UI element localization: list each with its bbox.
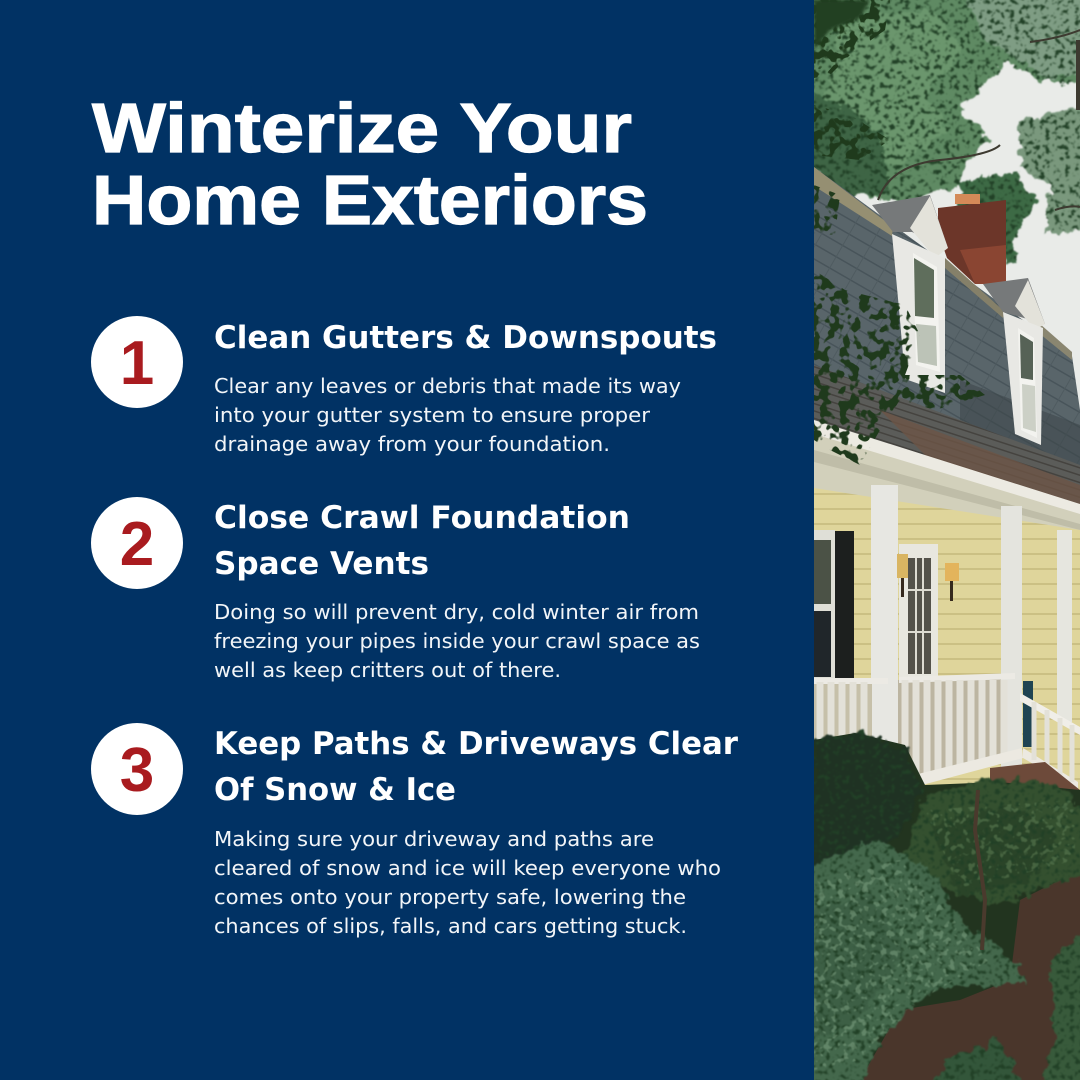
step 2 description: Doing so will prevent dry, cold winter air from [214, 600, 699, 624]
shrub base [814, 733, 1080, 1080]
step 3 description: comes onto your property safe, lowering the [214, 885, 686, 909]
step 2 heading: Space Vents [214, 546, 429, 582]
dormer 1 [872, 195, 948, 393]
step 2 description: freezing your pipes inside your crawl space as [214, 629, 700, 653]
number badge 1: 1 [120, 329, 154, 398]
dormer 2 [983, 278, 1045, 445]
pine trees [806, 0, 1080, 262]
step 3 heading: Keep Paths & Driveways Clear [214, 726, 739, 762]
left window and shutter [814, 530, 854, 680]
number badge 3 [91, 723, 183, 815]
tree branches [878, 30, 1080, 210]
step 3 description: Making sure your driveway and paths are [214, 827, 654, 851]
step 3 description [214, 827, 721, 938]
step 2 [91, 497, 700, 682]
step 3 [91, 723, 739, 938]
porch columns [871, 485, 1072, 770]
eaves and soffit [814, 420, 1080, 532]
porch lamps [897, 554, 959, 601]
number badge 2 [91, 497, 183, 589]
step 3 heading: Of Snow & Ice [214, 772, 456, 808]
roof shading [960, 380, 1080, 470]
step 3 heading [214, 726, 739, 808]
number badge 3: 3 [120, 736, 154, 805]
step 2 description: well as keep critters out of there. [214, 658, 561, 682]
step 1 description: Clear any leaves or debris that made its way [214, 374, 681, 398]
lower roof [814, 365, 1080, 508]
upper roof slates [814, 167, 1080, 470]
porch chair [1023, 681, 1033, 747]
foreground dark leaf branches [814, 0, 985, 465]
title: Home Exteriors [92, 161, 648, 239]
shrub leaf highlights [814, 800, 1075, 1070]
chimney [938, 194, 1006, 284]
step 3 description: chances of slips, falls, and cars getting stuck. [214, 914, 687, 938]
step 3 description: cleared of snow and ice will keep everyone who [214, 856, 721, 880]
step 1 description: into your gutter system to ensure proper [214, 403, 651, 427]
number badge 2: 2 [120, 510, 154, 579]
title [92, 89, 648, 239]
small tree trunk [975, 790, 985, 950]
step 1 description: drainage away from your foundation. [214, 432, 610, 456]
background panel [0, 0, 814, 1080]
yellow siding wall [814, 488, 1080, 790]
mulch ground [862, 875, 1080, 1080]
step 1 description [214, 374, 681, 456]
photo: house exterior with trees and shrubs [806, 0, 1080, 1080]
roof fascia [814, 167, 893, 236]
door [899, 544, 938, 678]
step 2 heading [214, 500, 630, 582]
brick foundation [990, 762, 1080, 790]
step 1 [91, 316, 717, 456]
step 1 heading: Clean Gutters & Downspouts [214, 320, 717, 356]
step 2 description [214, 600, 700, 682]
porch railings [814, 673, 1080, 790]
number badge 1 [91, 316, 183, 408]
title: Winterize Your [92, 89, 632, 167]
shrubs [806, 733, 1080, 1080]
step 2 heading: Close Crawl Foundation [214, 500, 630, 536]
